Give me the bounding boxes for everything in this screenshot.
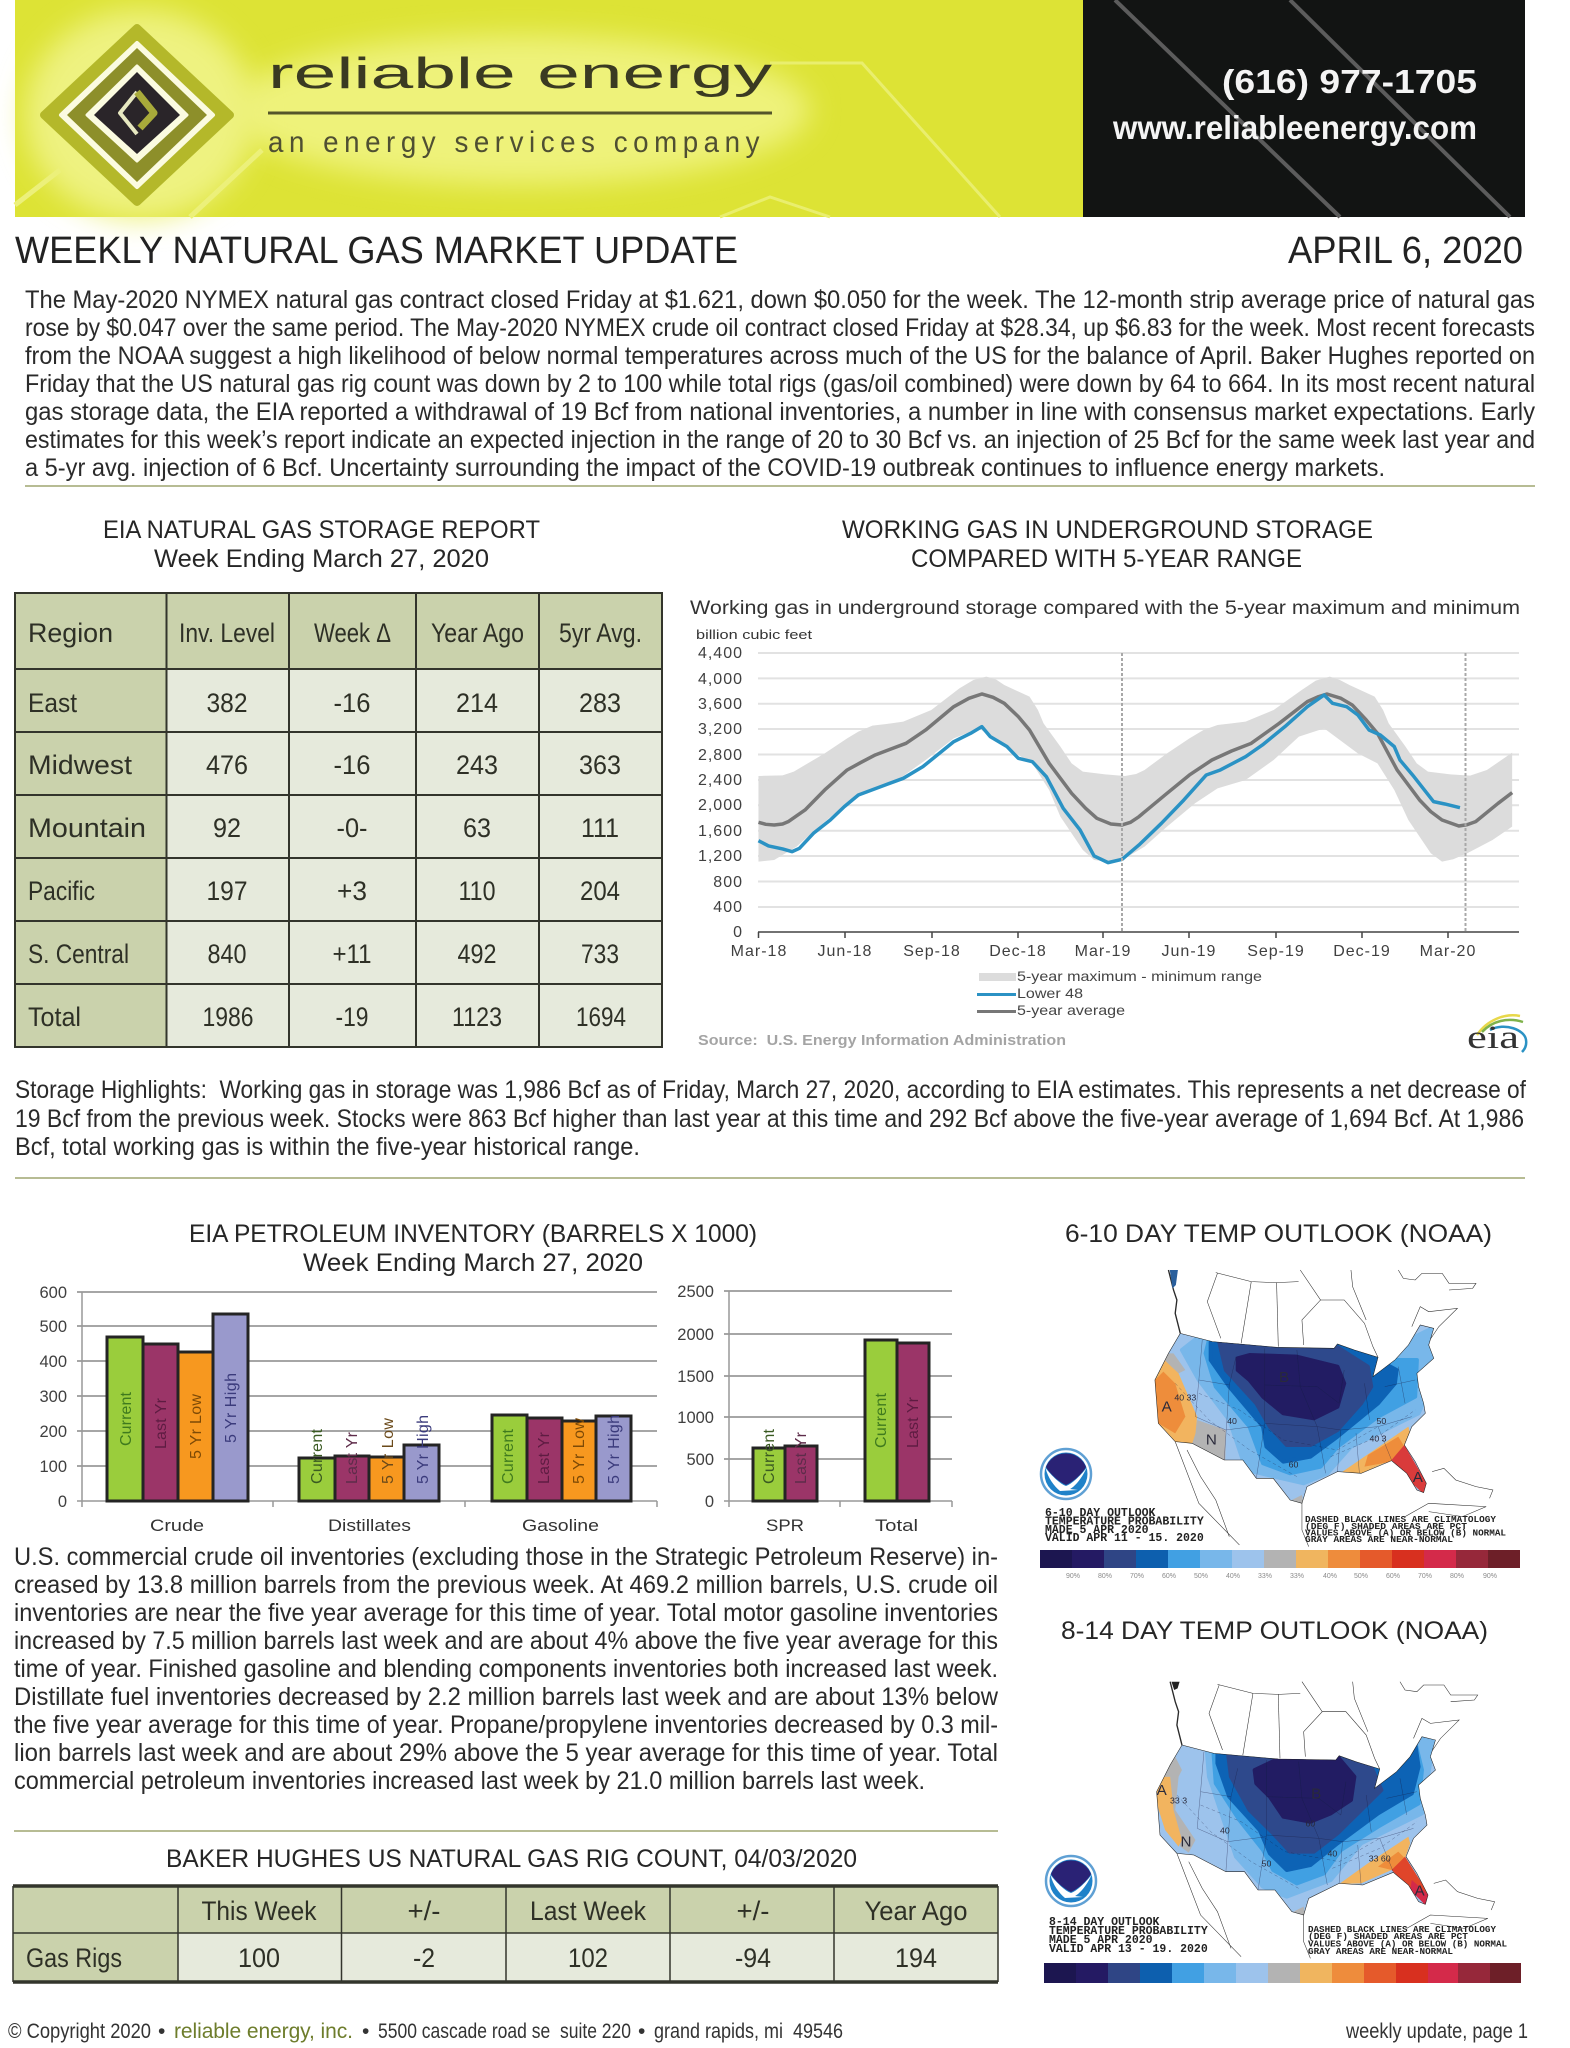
rig table data row: -2: [413, 1943, 435, 1973]
footer: © Copyright 2020: [8, 2020, 151, 2043]
map note: DASHED BLACK LINES ARE CLIMATOLOGY: [1305, 1515, 1497, 1525]
x axis labels: Dec-18: [989, 943, 1047, 960]
probability colour scale: 33%: [1290, 1573, 1304, 1580]
x axis labels: [731, 943, 1476, 960]
crude bar labels: [118, 1373, 240, 1459]
distillates bar labels: 5 Yr High: [415, 1415, 432, 1484]
footer: •: [362, 2020, 369, 2043]
footer: reliable energy, inc.: [174, 2020, 353, 2043]
y axis labels: 3,600: [698, 696, 743, 713]
icon: NOAA logo: [1041, 1449, 1091, 1499]
rig table data row: 194: [895, 1943, 937, 1973]
probability colour scale: [1044, 1963, 1521, 1983]
text block: market summary: gas storage data, the EIA reported a withdrawal of 19 Bcf from national inventories, a number in line with consensus market expectations. Early: [25, 398, 1535, 426]
icon: EIA logo: eia: [1467, 1020, 1519, 1056]
row: Total: [28, 1002, 626, 1032]
temperature probability zones: [1156, 1737, 1436, 1915]
x axis labels: Jun-18: [818, 943, 872, 960]
y axis labels: 2,000: [698, 797, 743, 814]
table header row: Region: [28, 618, 113, 648]
distillates bar labels: 5 Yr Low: [380, 1418, 397, 1484]
map note: VALUES ABOVE (A) OR BELOW (B) NORMAL: [1308, 1940, 1507, 1950]
y axis labels: 1500: [677, 1368, 714, 1386]
footer: •: [638, 2020, 645, 2043]
y axis labels: 0: [733, 924, 743, 941]
y axis labels: 0: [705, 1493, 714, 1511]
icon: NOAA logo: [1046, 1856, 1096, 1906]
SPR bars: [753, 1446, 817, 1501]
text block: petroleum summary: increased by 7.5 million barrels last week and are about 4% above the five year average for this: [14, 1627, 998, 1655]
probability colour scale: 40%: [1226, 1573, 1240, 1580]
row: Total: 1694: [576, 1002, 626, 1032]
chart title: Working gas in underground storage compared with the 5-year maximum and minimum: [690, 598, 1520, 619]
category labels: SPR: [766, 1516, 804, 1535]
phone number: (616) 977-1705: [1222, 63, 1477, 100]
text block: market summary: a 5-yr avg. injection of 6 Bcf. Uncertainty surrounding the impact of the COVID-19 outbreak continues to influence energy markets.: [25, 454, 1385, 482]
table: storage report: [15, 593, 662, 1047]
rig table data row: 102: [568, 1943, 608, 1973]
row: Total: Total: [28, 1002, 81, 1032]
row: Pacific: 110: [458, 876, 496, 906]
probability colour scale: 33%: [1258, 1573, 1272, 1580]
title: WEEKLY NATURAL GAS MARKET UPDATE: [15, 230, 738, 272]
map: 6-10 day temperature outlook: [1040, 1270, 1520, 1580]
row: East: 382: [206, 688, 248, 718]
y axis labels: 400: [39, 1353, 67, 1371]
y axis labels: 500: [686, 1451, 714, 1469]
y axis unit: billion cubic feet: [696, 627, 812, 642]
probability colour scale: 90%: [1483, 1573, 1497, 1580]
total bar labels: Last Yr: [905, 1396, 922, 1448]
x axis labels: Sep-19: [1247, 943, 1305, 960]
5-year range band: [758, 677, 1512, 862]
map zone labels: 50: [1262, 1859, 1272, 1869]
row: S. Central: [28, 939, 619, 969]
SPR bar labels: Last Yr: [793, 1431, 810, 1484]
icon: reliable energy diamond logo: [44, 28, 230, 202]
map note: GRAY AREAS ARE NEAR-NORMAL: [1308, 1947, 1453, 1957]
map zone labels: 33 60: [1369, 1854, 1391, 1864]
crude bar labels: 5 Yr Low: [188, 1394, 205, 1459]
crude bars: [107, 1314, 248, 1501]
map zone labels: A: [1157, 1782, 1168, 1799]
row: East: 283: [579, 688, 621, 718]
gasoline bar labels: Current: [500, 1428, 517, 1484]
y axis labels: 1,600: [698, 823, 743, 840]
x axis labels: Sep-18: [903, 943, 961, 960]
row: Midwest: Midwest: [28, 750, 133, 780]
row: Pacific: [28, 876, 620, 906]
category labels: [150, 1516, 599, 1535]
map: 8-14 day temperature outlook: [1044, 1682, 1521, 1983]
distillates bars: [299, 1445, 439, 1501]
map caption: 8-14 DAY OUTLOOK: [1049, 1916, 1160, 1929]
row: East: [28, 688, 621, 718]
map zone labels: N: [1206, 1432, 1217, 1449]
y axis labels: 1000: [677, 1409, 714, 1427]
y axis labels: 2000: [677, 1326, 714, 1344]
y axis labels: 4,000: [698, 671, 743, 688]
text block: petroleum summary: Distillate fuel inventories decreased by 2.2 million barrels last week and are about 13% below: [14, 1683, 999, 1711]
brand name: reliable energy: [268, 49, 772, 98]
crude bar labels: Current: [118, 1391, 135, 1446]
heading: petroleum inventory: EIA PETROLEUM INVENTORY (BARRELS X 1000): [189, 1220, 757, 1248]
map note: [1308, 1925, 1507, 1957]
map caption: MADE 5 APR 2020: [1049, 1934, 1153, 1947]
row: East: -16: [334, 688, 370, 718]
y axis labels: 2,400: [698, 772, 743, 789]
data curves: [758, 677, 1512, 863]
heading: rig count: BAKER HUGHES US NATURAL GAS RIG COUNT, 04/03/2020: [166, 1845, 857, 1873]
map note: DASHED BLACK LINES ARE CLIMATOLOGY: [1308, 1925, 1497, 1935]
row: Midwest: -16: [334, 750, 370, 780]
map zone labels: B: [1279, 1369, 1289, 1386]
table header row: Inv. Level: [179, 618, 275, 648]
y axis labels: 2500: [677, 1283, 714, 1301]
SPR bar labels: [761, 1428, 810, 1484]
probability colour scale: 80%: [1450, 1573, 1464, 1580]
y axis labels: 3,200: [698, 721, 743, 738]
row: S. Central: 733: [581, 939, 619, 969]
probability colour scale: 40%: [1323, 1573, 1337, 1580]
legend: [977, 968, 1262, 1018]
y axis labels: 500: [39, 1318, 67, 1336]
heading: petroleum inventory: [189, 1220, 757, 1277]
map zone labels: B: [1311, 1785, 1321, 1802]
text block: petroleum summary: the five year average for this time of year. Propane/propylene inventories decreased by 0.3 mil-: [14, 1711, 998, 1739]
map caption: TEMPERATURE PROBABILITY: [1049, 1925, 1208, 1938]
heading: 6-10 day outlook: 6-10 DAY TEMP OUTLOOK (NOAA): [1065, 1220, 1492, 1248]
y axis labels: 600: [39, 1284, 67, 1302]
y axis labels: 1,200: [698, 848, 743, 865]
table header row: [28, 618, 642, 648]
heading: EIA storage report: EIA NATURAL GAS STORAGE REPORT: [103, 516, 540, 544]
y axis labels: 300: [39, 1388, 67, 1406]
map note: [1305, 1515, 1506, 1545]
x axis labels: Mar-19: [1075, 943, 1131, 960]
text block: petroleum summary: inventories are near the five year average for this time of year. Total motor gasoline inventories: [14, 1599, 998, 1627]
rig table data row: [26, 1943, 937, 1973]
map zone labels: 50: [1376, 1416, 1386, 1426]
gasoline bar labels: [500, 1415, 623, 1484]
gasoline bar labels: 5 Yr High: [606, 1415, 623, 1484]
rig table data row: 100: [238, 1943, 280, 1973]
text block: petroleum summary: U.S. commercial crude oil inventories (excluding those in the Strategic Petroleum Reserve) in-: [14, 1543, 998, 1571]
map zone labels: 40: [1220, 1825, 1230, 1835]
map zone labels: 60: [1289, 1459, 1299, 1469]
category labels: Distillates: [328, 1516, 411, 1535]
heading: working gas chart: WORKING GAS IN UNDERGROUND STORAGE: [842, 516, 1373, 544]
map note: (DEG F) SHADED AREAS ARE PCT: [1308, 1932, 1469, 1942]
row: Mountain: 92: [213, 813, 241, 843]
text block: petroleum summary: [14, 1543, 999, 1795]
row: Midwest: 243: [456, 750, 498, 780]
website: www.reliableenergy.com: [1112, 109, 1477, 146]
table header row: Year Ago: [431, 618, 524, 648]
text block: petroleum summary: commercial petroleum inventories increased last week by 21.0 million barrels last week.: [14, 1767, 925, 1795]
table header row: 5yr Avg.: [559, 618, 642, 648]
footer: [8, 2020, 1528, 2043]
map zone labels: 40: [1327, 1849, 1337, 1859]
row: S. Central: +11: [332, 939, 372, 969]
category labels: Gasoline: [522, 1516, 599, 1535]
row: Midwest: 476: [206, 750, 248, 780]
legend: Lower 48: [1017, 985, 1083, 1001]
heading: EIA storage report: [103, 516, 540, 573]
map note: VALUES ABOVE (A) OR BELOW (B) NORMAL: [1305, 1528, 1506, 1538]
row: Mountain: Mountain: [28, 813, 146, 843]
source note: Source: U.S. Energy Information Administration: [698, 1033, 1066, 1049]
crude bar labels: 5 Yr High: [223, 1373, 240, 1443]
y axis labels: 200: [39, 1423, 67, 1441]
map zone labels: 60: [1306, 1819, 1315, 1829]
probability colour scale: 80%: [1098, 1573, 1112, 1580]
probability colour scale: [1040, 1550, 1520, 1580]
rig table data row: Gas Rigs: [26, 1943, 122, 1973]
date: APRIL 6, 2020: [1288, 230, 1523, 272]
row: Mountain: -0-: [336, 813, 368, 843]
x axis labels: Jun-19: [1162, 943, 1216, 960]
total bar labels: [873, 1392, 922, 1448]
rig table data row: -94: [735, 1943, 771, 1973]
icon: EIA logo: [1467, 1015, 1526, 1056]
row: Total: -19: [336, 1002, 368, 1032]
map zone labels: 40: [1227, 1416, 1237, 1426]
distillates bar labels: [309, 1415, 432, 1484]
map zone labels: [1157, 1782, 1426, 1900]
row: S. Central: 840: [208, 939, 246, 969]
row: S. Central: 492: [458, 939, 496, 969]
text block: market summary: [25, 286, 1535, 482]
row: Mountain: 63: [463, 813, 491, 843]
gasoline bars: [492, 1415, 631, 1501]
text block: petroleum summary: time of year. Finished gasoline and blending components inventories both increased last week.: [14, 1655, 998, 1683]
distillates bar labels: Current: [309, 1428, 326, 1484]
row: Midwest: [28, 750, 621, 780]
text block: market summary: The May-2020 NYMEX natural gas contract closed Friday at $1.621, down $0.050 for the week. The 12-month strip average price of natural gas: [25, 286, 1535, 314]
rig table header row: +/-: [736, 1896, 770, 1926]
heading: EIA storage report: Week Ending March 27, 2020: [154, 545, 489, 573]
legend: 5-year average: [1017, 1002, 1125, 1018]
y axis labels: 100: [39, 1458, 67, 1476]
probability colour scale: 60%: [1386, 1573, 1400, 1580]
5-year average line: [758, 694, 1512, 826]
rig table header row: Last Week: [530, 1896, 646, 1926]
row: Total: 1986: [202, 1002, 254, 1032]
map zone labels: A: [1162, 1398, 1173, 1415]
row: Midwest: 363: [579, 750, 621, 780]
map caption: VALID APR 11 - 15. 2020: [1045, 1532, 1204, 1545]
y axis labels: 0: [58, 1493, 67, 1511]
chart: working gas in underground storage: [690, 598, 1526, 1056]
probability colour scale: 50%: [1194, 1573, 1208, 1580]
distillates bar labels: Last Yr: [344, 1431, 361, 1484]
gasoline bar labels: Last Yr: [536, 1431, 553, 1484]
table: rig count: [13, 1886, 998, 1983]
row: Pacific: Pacific: [28, 876, 95, 906]
temperature probability zones: [1155, 1325, 1434, 1503]
map note: GRAY AREAS ARE NEAR-NORMAL: [1305, 1535, 1453, 1545]
map zone labels: 40 3: [1369, 1434, 1387, 1444]
map zone labels: 33 3: [1170, 1795, 1187, 1805]
map caption: 6-10 DAY OUTLOOK: [1045, 1507, 1156, 1520]
map caption: VALID APR 13 - 19. 2020: [1049, 1943, 1208, 1956]
x axis labels: Mar-20: [1420, 943, 1476, 960]
row: Mountain: [28, 813, 619, 843]
map caption: [1045, 1507, 1204, 1545]
row: Pacific: 197: [206, 876, 248, 906]
total bar labels: Current: [873, 1392, 890, 1448]
tagline: an energy services company: [268, 126, 765, 159]
text block: storage highlights: [15, 1076, 1526, 1161]
map zone labels: N: [1181, 1834, 1192, 1851]
crude bar labels: Last Yr: [153, 1397, 170, 1449]
row: S. Central: S. Central: [28, 939, 129, 969]
y axis labels: [39, 1284, 67, 1511]
bar chart: crude, distillates, gasoline: [39, 1284, 657, 1535]
text block: petroleum summary: creased by 13.8 million barrels from the previous week. At 469.2 million barrels, U.S. crude oil: [14, 1571, 998, 1599]
category labels: [766, 1516, 918, 1535]
table header row: Week Δ: [314, 618, 391, 648]
footer: grand rapids, mi 49546: [654, 2020, 843, 2043]
row: Pacific: +3: [337, 876, 367, 906]
rig table header row: This Week: [202, 1896, 317, 1926]
footer: 5500 cascade road se suite 220: [378, 2020, 631, 2043]
rig table header row: Year Ago: [864, 1896, 968, 1926]
probability colour scale: 70%: [1130, 1573, 1144, 1580]
rig table header row: [202, 1896, 968, 1926]
map caption: MADE 5 APR 2020: [1045, 1524, 1149, 1537]
legend: 5-year maximum - minimum range: [1017, 968, 1262, 984]
probability colour scale: 90%: [1066, 1573, 1080, 1580]
SPR bar labels: Current: [761, 1428, 778, 1484]
row: Pacific: 204: [580, 876, 620, 906]
gasoline bar labels: 5 Yr Low: [571, 1418, 588, 1484]
map note: (DEG F) SHADED AREAS ARE PCT: [1305, 1522, 1468, 1532]
heading: working gas chart: COMPARED WITH 5-YEAR RANGE: [911, 545, 1302, 573]
map caption: [1049, 1916, 1208, 1956]
y axis labels: 4,400: [698, 645, 743, 662]
map caption: TEMPERATURE PROBABILITY: [1045, 1516, 1204, 1528]
text block: storage highlights: Bcf, total working gas is within the five-year historical range.: [15, 1133, 640, 1161]
map zone labels: [1162, 1369, 1424, 1486]
probability colour scale: 50%: [1354, 1573, 1368, 1580]
x axis labels: Dec-19: [1333, 943, 1391, 960]
map zone labels: A: [1415, 1883, 1426, 1900]
probability colour scale: 60%: [1162, 1573, 1176, 1580]
y axis labels: 800: [713, 874, 743, 891]
panel: header banner: [15, 0, 1525, 220]
category labels: Crude: [150, 1516, 204, 1535]
heading: working gas chart: [842, 516, 1373, 573]
row: East: East: [28, 688, 77, 718]
black contact panel: [1083, 0, 1525, 217]
bar chart: SPR and total: [677, 1283, 952, 1535]
x axis labels: Mar-18: [731, 943, 787, 960]
y axis labels: [698, 645, 743, 941]
row: East: 214: [456, 688, 498, 718]
map zone labels: 40 33: [1174, 1393, 1196, 1403]
y axis labels: 400: [713, 899, 743, 916]
y axis labels: 2,800: [698, 747, 743, 764]
total bars: [865, 1340, 929, 1501]
yellow banner background: [15, 0, 1083, 220]
footer: •: [158, 2020, 165, 2043]
map zone labels: A: [1413, 1469, 1424, 1486]
text block: petroleum summary: lion barrels last week and are about 29% above the 5 year average for this time of year. Total: [14, 1739, 998, 1767]
rig table header row: +/-: [408, 1896, 440, 1926]
row: Mountain: 111: [581, 813, 619, 843]
heading: petroleum inventory: Week Ending March 27, 2020: [303, 1249, 643, 1277]
footer: weekly update, page 1: [1345, 2020, 1528, 2043]
category labels: Total: [875, 1516, 918, 1535]
y axis labels: [677, 1283, 714, 1511]
Lower 48 line: [758, 695, 1460, 863]
heading: 8-14 day outlook: 8-14 DAY TEMP OUTLOOK (NOAA): [1061, 1617, 1488, 1645]
probability colour scale: 70%: [1418, 1573, 1432, 1580]
row: Total: 1123: [452, 1002, 502, 1032]
